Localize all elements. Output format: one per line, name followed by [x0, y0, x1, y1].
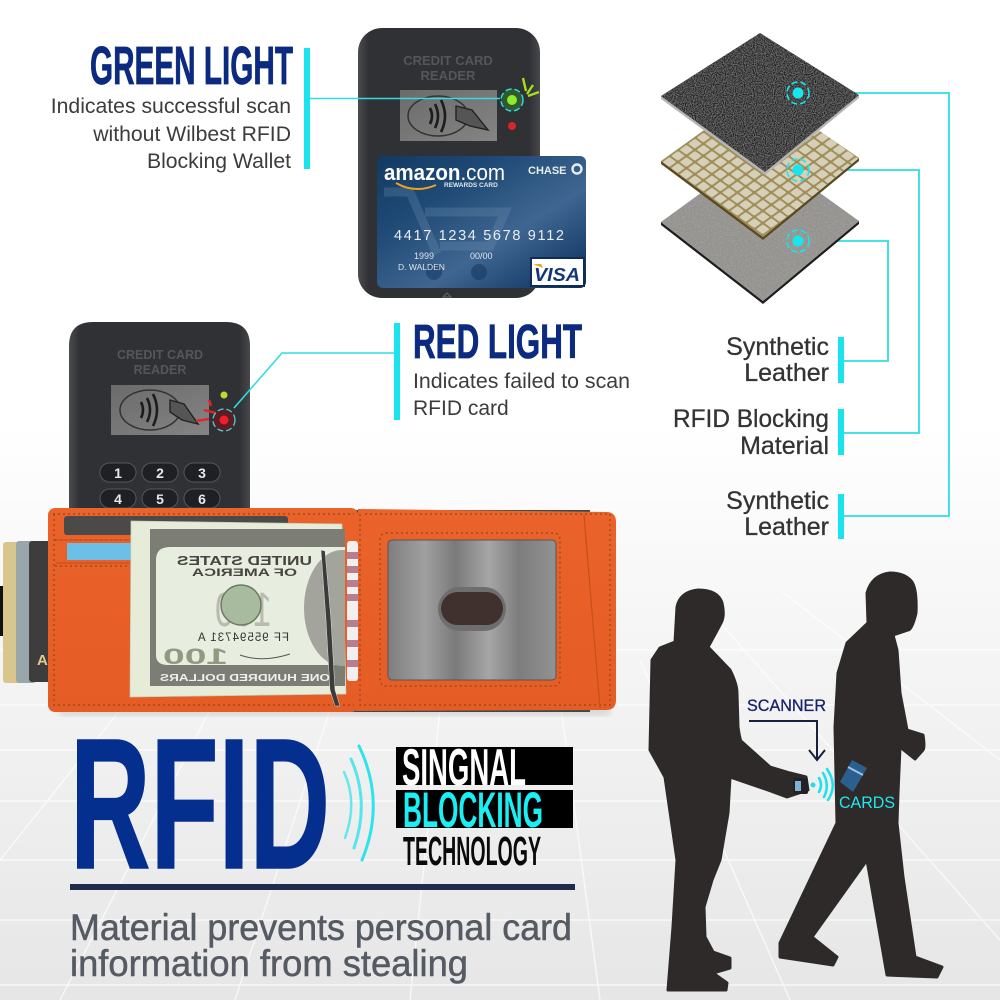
silhouette: walking person with cards [780, 573, 942, 977]
card reader with red light [69, 322, 250, 530]
text: green light description: Blocking Wallet [147, 150, 291, 173]
green light accent bar [304, 48, 310, 169]
credit card: D. WALDEN [398, 262, 445, 272]
label: scanner: SCANNER [747, 696, 826, 715]
heading: green light: GREEN LIGHT [90, 36, 293, 96]
visa logo [531, 258, 584, 286]
heading: red light: RED LIGHT [413, 316, 582, 369]
card reader with green light: CREDIT CARD [403, 53, 493, 68]
arrow: scanner pointer [749, 721, 825, 760]
card reader with green light: READER [421, 68, 476, 83]
card reader with red light: 4 [114, 491, 122, 507]
banknote: 100 [163, 644, 228, 669]
ID window [388, 540, 556, 680]
material layers [661, 33, 859, 304]
banknote [130, 520, 346, 698]
text: material statement [70, 907, 572, 984]
banknote: 100 [215, 584, 272, 637]
badge: signal blocking technology: TECHNOLOGY [403, 828, 541, 874]
visa logo: VISA [534, 265, 580, 285]
red light accent bar [394, 323, 400, 420]
cards behind wallet [0, 541, 53, 683]
credit card: 1999 [414, 251, 434, 261]
credit card: amazon.com [384, 160, 505, 185]
text: material statement: Material prevents personal card [70, 907, 572, 948]
banknote: FF 95594731 A [198, 632, 289, 644]
layer labels: Leather [744, 513, 829, 541]
marker: top layer [787, 82, 809, 104]
card reader with red light: 2 [156, 465, 164, 481]
badge: signal blocking technology: SINGNAL [402, 739, 526, 797]
red light connector [234, 353, 394, 408]
card reader with green light [358, 28, 540, 298]
text: red light description: Indicates failed to scan [413, 370, 630, 393]
cards behind wallet: A [37, 652, 48, 669]
layer labels: Leather [744, 359, 829, 387]
icon: scan waves [810, 769, 833, 800]
text: red light description [413, 370, 630, 420]
card reader with red light: 1 [114, 465, 122, 481]
layer labels: Material [740, 432, 829, 460]
label: cards: CARDS [839, 793, 895, 812]
credit card: CHASE [528, 165, 567, 177]
money clip [321, 550, 340, 706]
silhouette: standing person with scanner [650, 590, 808, 990]
marker: middle layer [787, 159, 809, 181]
layer: top synthetic leather [661, 33, 859, 175]
banknote: OF AMERICA [192, 567, 297, 579]
icon: handheld scanner [793, 778, 808, 794]
card reader with red light: 3 [198, 465, 206, 481]
credit card: REWARDS CARD [444, 182, 498, 189]
green light connector [310, 98, 500, 100]
text: material statement: information from stealing [70, 943, 468, 984]
marker: bottom layer [787, 230, 809, 252]
credit card: 4417 1234 5678 9112 [394, 228, 564, 244]
icon: card on person [840, 760, 867, 792]
label bars [838, 337, 844, 539]
wallet [0, 508, 616, 716]
layer: bottom synthetic leather [661, 150, 859, 304]
card reader with red light: CREDIT CARD [117, 348, 203, 362]
credit card [377, 156, 586, 288]
keypad [100, 463, 220, 508]
divider rule [70, 884, 575, 890]
layer: RFID blocking material [661, 90, 859, 240]
banknote: UNITED STATES [177, 553, 312, 568]
text: green light description: without Wilbest RFID [92, 123, 291, 146]
connector lines: layer callouts [815, 93, 949, 516]
striped card [347, 541, 358, 681]
card reader with red light: READER [134, 363, 186, 377]
banknote: ONE HUNDRED DOLLARS [160, 673, 330, 684]
card reader with red light: 6 [198, 491, 206, 507]
text: red light description: RFID card [413, 397, 509, 420]
text: green light description: Indicates successful scan [51, 95, 291, 118]
badge: signal blocking technology [396, 739, 573, 874]
RFID wordmark: RFID [70, 701, 330, 908]
layer labels: Synthetic [726, 487, 829, 515]
layer labels: RFID Blocking [673, 405, 829, 433]
card reader with red light: 5 [156, 491, 164, 507]
layer labels [673, 333, 829, 541]
stitching [53, 514, 610, 705]
icon: signal waves [344, 746, 373, 860]
text: green light description [51, 95, 291, 173]
badge: signal blocking technology: BLOCKING [403, 782, 543, 838]
credit card: 00/00 [470, 251, 493, 261]
layer labels: Synthetic [726, 333, 829, 361]
